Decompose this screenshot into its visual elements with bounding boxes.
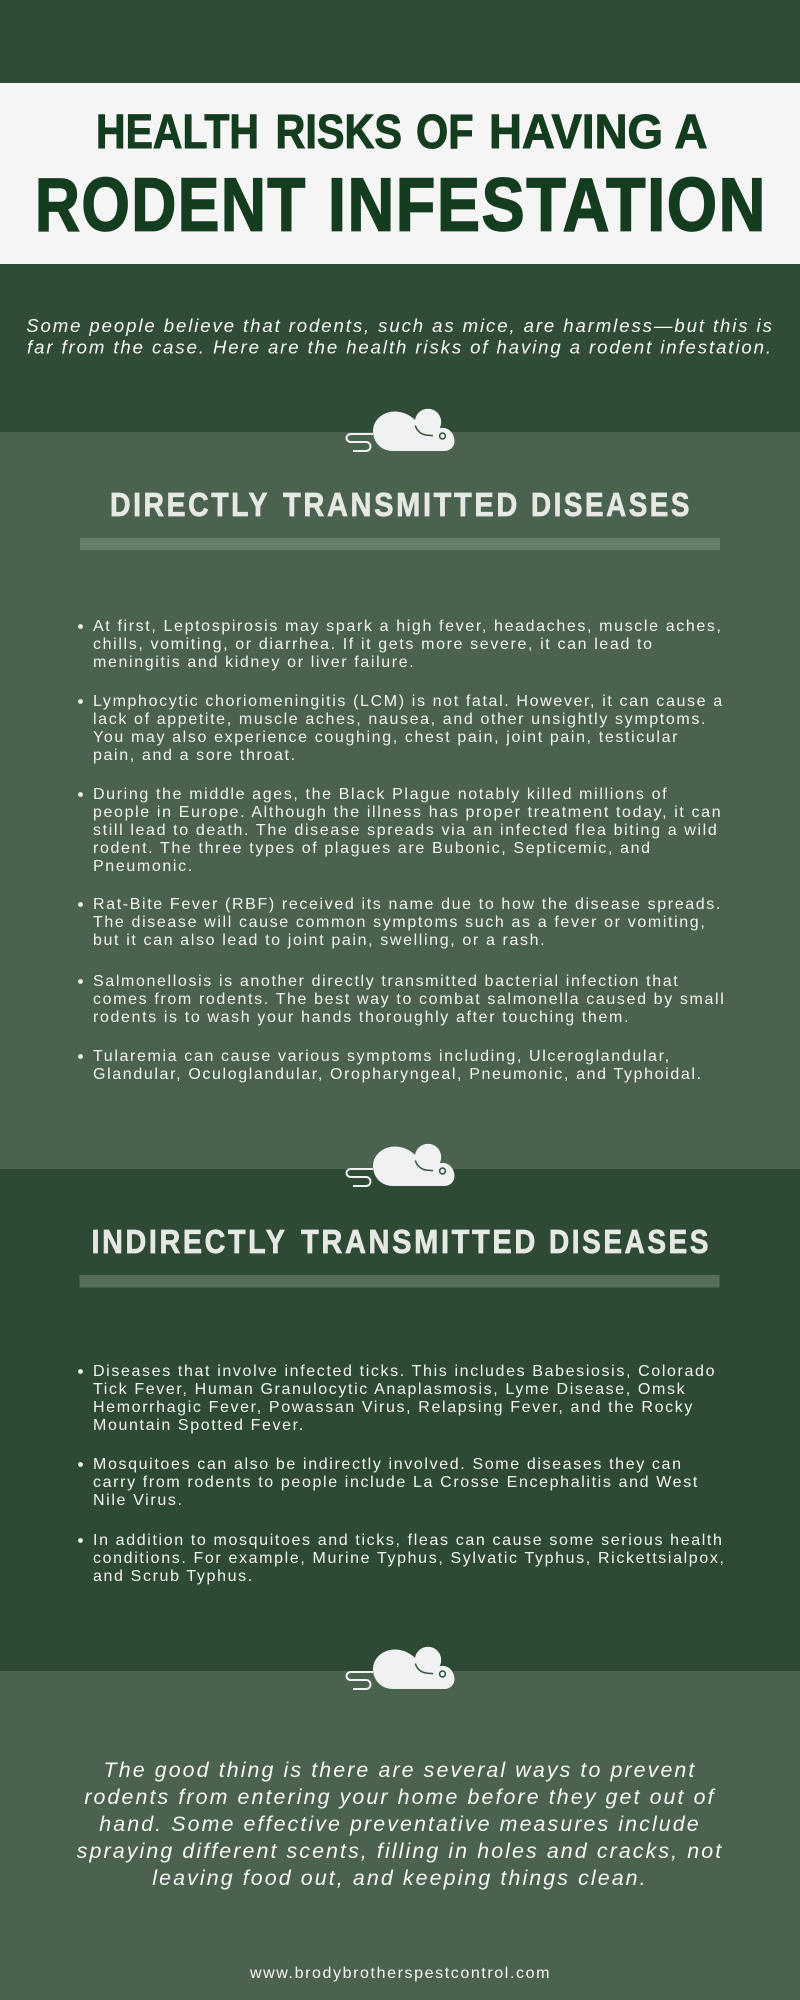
section background: indirectly transmitted xyxy=(0,1169,800,1671)
title line 1 xyxy=(96,106,708,159)
section background: conclusion xyxy=(0,1671,800,2000)
list: directly transmitted diseases: Salmonellosis is another directly transmitted bacterial infection that xyxy=(93,973,679,990)
list: directly transmitted diseases: lack of appetite, muscle aches, nausea, and other unsightly symptoms. xyxy=(93,711,707,728)
list: directly transmitted diseases xyxy=(78,618,725,1083)
list: directly transmitted diseases: rodents is to wash your hands thoroughly after touching them. xyxy=(93,1009,630,1026)
list: directly transmitted diseases: You may also experience coughing, chest pain, joint pain, testicular xyxy=(93,729,679,746)
list: directly transmitted diseases: still lead to death. The disease spreads via an infected flea biting a wild xyxy=(93,822,718,839)
conclusion text: hand. Some effective preventative measures include xyxy=(99,1812,701,1836)
list: indirectly transmitted diseases: Mosquitoes can also be indirectly involved. Some diseases they can xyxy=(93,1456,683,1473)
heading: directly transmitted diseases: TRANSMITTED xyxy=(283,486,520,523)
heading: indirectly transmitted diseases: DISEASES xyxy=(549,1223,711,1260)
intro text: Some people believe that rodents, such as mice, are harmless—but this is xyxy=(26,315,774,336)
list: directly transmitted diseases: Tularemia can cause various symptoms including, Ulceroglandular, xyxy=(93,1048,671,1065)
title line 2 xyxy=(35,162,767,246)
list: directly transmitted diseases: comes from rodents. The best way to combat salmonella caused by small xyxy=(93,991,725,1008)
section background: intro xyxy=(0,0,800,432)
icon: mouse 2 xyxy=(346,1144,454,1186)
list: indirectly transmitted diseases: Mountain Spotted Fever. xyxy=(93,1417,305,1434)
heading: indirectly transmitted diseases: TRANSMITTED xyxy=(301,1223,538,1260)
heading: directly transmitted diseases: DISEASES xyxy=(531,486,692,523)
title panel xyxy=(0,83,800,264)
intro text: far from the case. Here are the health risks of having a rodent infestation. xyxy=(27,336,773,358)
title line 1: A xyxy=(674,106,708,159)
title line 2: RODENT xyxy=(35,162,307,246)
heading rule xyxy=(80,1275,720,1288)
title line 1: HEALTH xyxy=(96,106,259,159)
conclusion text: The good thing is there are several ways to prevent xyxy=(104,1758,696,1782)
list: directly transmitted diseases: At first, Leptospirosis may spark a high fever, headaches, muscle aches, xyxy=(93,618,723,635)
icon: mouse 1 xyxy=(346,409,454,451)
list: directly transmitted diseases: people in Europe. Although the illness has proper treatment today, it can xyxy=(93,804,722,821)
list: indirectly transmitted diseases: and Scrub Typhus. xyxy=(93,1568,254,1585)
title line 1: OF xyxy=(416,106,474,159)
heading rule xyxy=(80,538,720,550)
list: directly transmitted diseases: pain, and a sore throat. xyxy=(93,747,297,764)
list: directly transmitted diseases: meningitis and kidney or liver failure. xyxy=(93,654,415,671)
list: directly transmitted diseases: Pneumonic. xyxy=(93,858,194,875)
list: directly transmitted diseases: During the middle ages, the Black Plague notably killed millions of xyxy=(93,786,668,803)
heading: indirectly transmitted diseases xyxy=(92,1223,711,1260)
list: directly transmitted diseases: Glandular, Oculoglandular, Oropharyngeal, Pneumonic, and Typhoidal. xyxy=(93,1066,703,1083)
conclusion text: rodents from entering your home before they get out of xyxy=(84,1785,716,1809)
title line 1: HAVING xyxy=(489,106,663,159)
list: indirectly transmitted diseases: carry from rodents to people include La Crosse Encephalitis and West xyxy=(93,1474,699,1491)
list: indirectly transmitted diseases: Nile Virus. xyxy=(93,1492,184,1509)
list: indirectly transmitted diseases: In addition to mosquitoes and ticks, fleas can cause some serious health xyxy=(93,1532,724,1549)
list: directly transmitted diseases: Rat-Bite Fever (RBF) received its name due to how the disease spreads. xyxy=(93,896,722,913)
list: indirectly transmitted diseases: Diseases that involve infected ticks. This includes Babesiosis, Colorado xyxy=(93,1363,716,1380)
list: indirectly transmitted diseases: conditions. For example, Murine Typhus, Sylvatic Typhus, Rickettsialpox, xyxy=(93,1550,726,1567)
conclusion text xyxy=(77,1758,723,1890)
heading: indirectly transmitted diseases: INDIRECTLY xyxy=(92,1223,288,1260)
conclusion text: leaving food out, and keeping things clean. xyxy=(152,1866,648,1890)
list: directly transmitted diseases: Lymphocytic choriomeningitis (LCM) is not fatal. However, it can cause a xyxy=(93,693,724,710)
list: directly transmitted diseases: chills, vomiting, or diarrhea. If it gets more severe, it can lead to xyxy=(93,636,654,653)
footer url: www.brodybrotherspestcontrol.com xyxy=(249,1965,551,1982)
list: indirectly transmitted diseases: Hemorrhagic Fever, Powassan Virus, Relapsing Fever, and the Rocky xyxy=(93,1399,694,1416)
section background: directly transmitted xyxy=(0,432,800,1169)
conclusion text: spraying different scents, filling in holes and cracks, not xyxy=(77,1839,723,1863)
list: directly transmitted diseases: rodent. The three types of plagues are Bubonic, Septicemic, and xyxy=(93,840,652,857)
list: directly transmitted diseases: The disease will cause common symptoms such as a fever or vomiting, xyxy=(93,914,706,931)
title line 1: RISKS xyxy=(276,106,402,159)
intro text xyxy=(26,315,774,358)
heading: directly transmitted diseases: DIRECTLY xyxy=(110,486,270,523)
list: indirectly transmitted diseases: Tick Fever, Human Granulocytic Anaplasmosis, Lyme Disease, Omsk xyxy=(93,1381,686,1398)
list: directly transmitted diseases: but it can also lead to joint pain, swelling, or a rash. xyxy=(93,932,546,949)
heading: directly transmitted diseases xyxy=(110,486,692,523)
list: indirectly transmitted diseases xyxy=(78,1363,726,1585)
icon: mouse 3 xyxy=(346,1647,454,1689)
